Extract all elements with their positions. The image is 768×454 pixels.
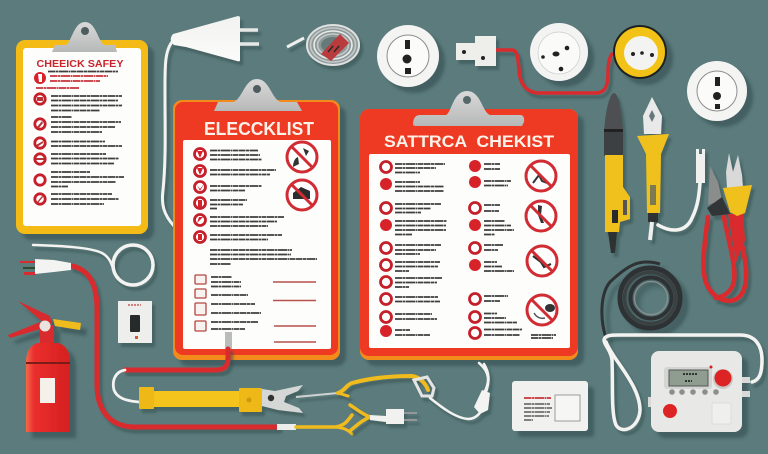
yellow handled pliers	[637, 97, 705, 240]
red wire from clipboard	[113, 349, 228, 402]
square key	[712, 403, 731, 424]
clip	[214, 79, 302, 111]
white cable with ring	[33, 245, 153, 285]
clip	[52, 22, 117, 52]
prohibition sign 2	[287, 180, 317, 210]
outlet 1	[377, 25, 439, 87]
plug with white cord	[162, 16, 259, 226]
small buttons	[669, 389, 719, 395]
soldering iron tester	[604, 93, 630, 253]
white wall box	[512, 381, 588, 431]
digital meter	[648, 351, 750, 432]
prohibition sign 1	[287, 142, 317, 172]
white cable loop	[604, 335, 762, 430]
display	[664, 367, 712, 389]
plug with long red cable	[20, 259, 352, 434]
clipboard: check safety	[16, 22, 148, 234]
red handled pliers	[703, 153, 752, 301]
heading: CHEEICK SAFEY	[36, 58, 124, 70]
connectors	[742, 377, 750, 383]
clip	[413, 91, 524, 126]
prohibition sign C	[527, 246, 557, 276]
checklist rows	[194, 148, 317, 264]
main red button	[713, 369, 733, 389]
secondary red button	[663, 404, 677, 418]
outlet 3	[687, 61, 747, 121]
adapter and red wire	[456, 36, 612, 93]
checklist rows	[34, 72, 124, 204]
yellow cable with white cord and plug	[338, 363, 490, 430]
prohibition sign D	[527, 295, 557, 325]
left column rows	[380, 162, 447, 337]
yellow insulated cutter	[139, 385, 338, 413]
yellow ring outlet	[613, 25, 667, 79]
heading: SATTRCA CHEKIST	[384, 132, 555, 151]
check boxes	[195, 275, 316, 342]
prohibition sign A	[526, 161, 556, 191]
black cable coil	[602, 262, 680, 338]
wire coil with red tag	[287, 24, 360, 66]
clipboard: electrical checklist	[173, 79, 340, 360]
outlet 2	[530, 23, 588, 81]
wall switch	[118, 301, 152, 343]
prohibition sign B	[526, 201, 556, 231]
right column rows	[469, 160, 556, 338]
clipboard: safety checklist	[360, 91, 578, 360]
heading: ELECCKLIST	[204, 119, 314, 139]
fire extinguisher	[8, 301, 81, 432]
clipboard cable stub	[225, 332, 232, 349]
